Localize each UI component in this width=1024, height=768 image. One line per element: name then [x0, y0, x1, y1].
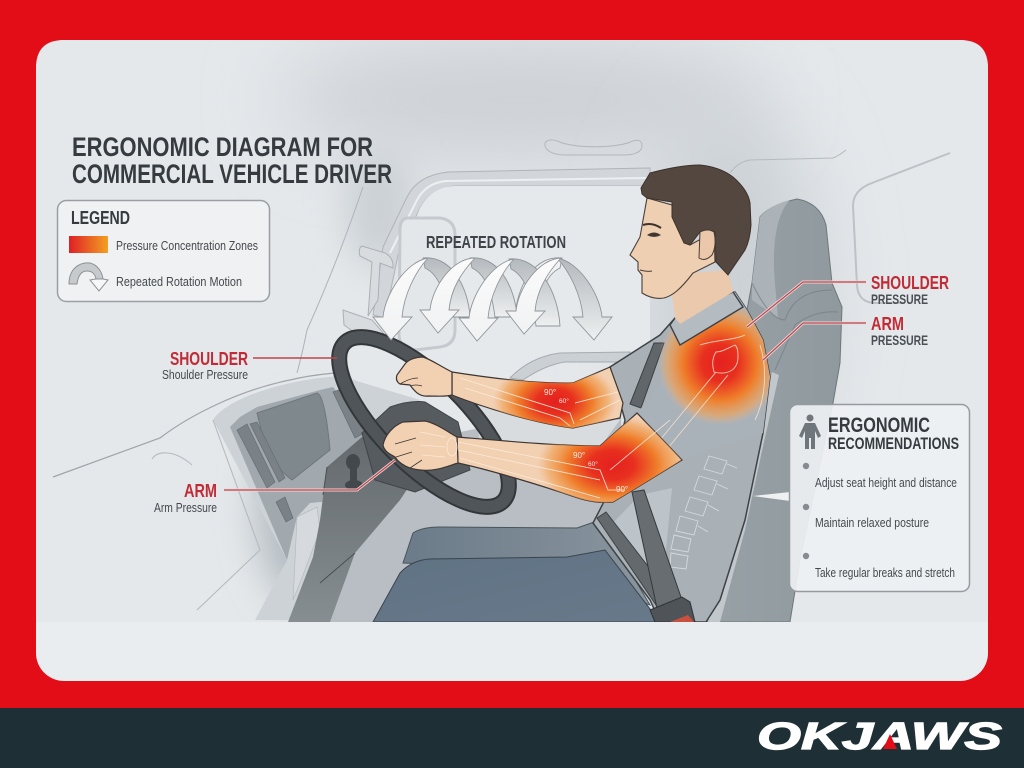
left shoulder callout: Shoulder Pressure — [162, 368, 248, 382]
bottom dark footer bar — [0, 708, 1024, 768]
seat belt buckle — [650, 597, 695, 622]
right arm callout — [763, 313, 928, 360]
pressure colour swatch — [69, 236, 108, 253]
arrow three — [459, 259, 560, 341]
buckle red tab — [670, 615, 694, 622]
right shoulder callout: PRESSURE — [871, 291, 928, 307]
far arm heat zone — [493, 360, 617, 444]
angle labels: 60° — [588, 460, 598, 468]
near forearm — [457, 413, 682, 502]
recommendations heading: ERGONOMIC — [828, 414, 930, 437]
far forearm — [452, 367, 623, 428]
dashboard panel left — [213, 376, 420, 620]
left arm callout: Arm Pressure — [154, 501, 217, 515]
windshield glass — [416, 186, 650, 352]
thigh near — [373, 550, 660, 622]
hair — [641, 165, 751, 275]
angle labels: 90° — [544, 388, 556, 397]
left shoulder callout: SHOULDER — [170, 348, 248, 369]
seat shoulder ridge — [752, 283, 838, 370]
lower floor behind wheel — [330, 417, 622, 622]
spine outline overlay — [670, 456, 737, 569]
main panel — [36, 40, 988, 681]
dashboard cluster — [230, 387, 362, 560]
windshield inner highlight — [390, 178, 648, 253]
OKJAWS logo: OKJAWS — [757, 716, 1002, 758]
thigh far — [403, 520, 650, 605]
left shoulder callout — [162, 348, 337, 382]
lap belt — [596, 511, 656, 606]
light area between arms — [478, 405, 620, 446]
A pillar line — [297, 187, 363, 373]
torso shading — [614, 488, 672, 564]
cab interior shading — [36, 40, 988, 622]
far arm bones — [460, 378, 620, 426]
seat back and headrest — [706, 199, 842, 622]
arrow one — [373, 258, 470, 340]
angle labels: 90° — [616, 485, 628, 494]
far hand — [396, 357, 452, 396]
repeated rotation heading: REPEATED ROTATION — [426, 232, 566, 252]
pressure legend text: Pressure Concentration Zones — [116, 238, 258, 253]
title — [72, 132, 392, 189]
far finger lines — [400, 378, 422, 386]
angle labels: 90° — [573, 451, 585, 460]
ear — [699, 230, 715, 259]
rotation arrows group — [373, 258, 612, 341]
rotation arrow icon — [69, 263, 108, 291]
near arm heat zone — [537, 415, 687, 515]
recommendations heading — [828, 414, 959, 453]
left arm callout: ARM — [184, 480, 217, 501]
right arm callout: PRESSURE — [871, 332, 928, 348]
icon: person — [799, 414, 821, 449]
steering column console — [288, 436, 406, 622]
recommendation list: Take regular breaks and stretch — [815, 565, 955, 580]
diagonal chest belt — [632, 490, 682, 613]
dashboard sweep line — [53, 373, 335, 477]
shoulder heat zone — [658, 301, 782, 425]
neck — [672, 270, 733, 324]
side door brackets — [343, 246, 393, 345]
instrument screen — [257, 393, 330, 480]
recommendation bullets — [803, 463, 809, 559]
illustration: truck cab interior and driver — [36, 40, 988, 622]
upper cab line behind head — [730, 150, 846, 173]
windshield frame — [373, 168, 650, 318]
title: COMMERCIAL VEHICLE DRIVER — [72, 159, 392, 189]
near arm bones — [458, 420, 670, 498]
right shoulder callout: SHOULDER — [871, 272, 949, 293]
shoulder bone overlay — [660, 335, 765, 448]
arrow two — [420, 258, 517, 333]
arrow four — [506, 258, 561, 334]
shoulder sleeve — [640, 292, 770, 434]
collar — [670, 292, 743, 345]
gear knob — [345, 454, 363, 490]
facial details — [640, 224, 661, 271]
near hand — [383, 421, 458, 470]
right side window — [853, 153, 950, 303]
roof grab handle — [545, 140, 642, 155]
steering wheel — [314, 312, 534, 532]
ergonomic recommendations panel — [753, 404, 970, 592]
angle labels: 60° — [559, 397, 569, 405]
legend panel — [58, 200, 270, 302]
recommendation list: Adjust seat height and distance — [815, 475, 957, 490]
angle labels — [544, 388, 628, 494]
dashboard band behind driver — [510, 352, 630, 380]
face — [630, 198, 715, 298]
right arm callout: ARM — [871, 313, 904, 334]
title: ERGONOMIC DIAGRAM FOR — [72, 132, 373, 162]
lower panel edge — [293, 507, 320, 600]
recommendations heading: RECOMMENDATIONS — [828, 435, 959, 453]
seat side bolster band — [708, 372, 779, 622]
centre mirror — [399, 218, 455, 350]
near finger lines — [395, 438, 422, 468]
recommendation list: Maintain relaxed posture — [815, 515, 929, 530]
rotation legend text: Repeated Rotation Motion — [116, 274, 242, 289]
legend heading: LEGEND — [71, 207, 130, 228]
console detail line — [320, 467, 355, 583]
recommendation list — [815, 475, 957, 580]
shoulder belt — [630, 343, 664, 408]
arrow five — [515, 258, 612, 340]
torso shirt — [593, 292, 770, 622]
hand bones — [420, 432, 457, 457]
dashboard vents — [237, 388, 366, 522]
headrest highlight — [752, 200, 790, 318]
OKJAWS logo — [757, 716, 1002, 758]
right shoulder callout — [747, 272, 949, 327]
wheel hub — [362, 402, 470, 492]
left arm callout — [154, 460, 395, 515]
